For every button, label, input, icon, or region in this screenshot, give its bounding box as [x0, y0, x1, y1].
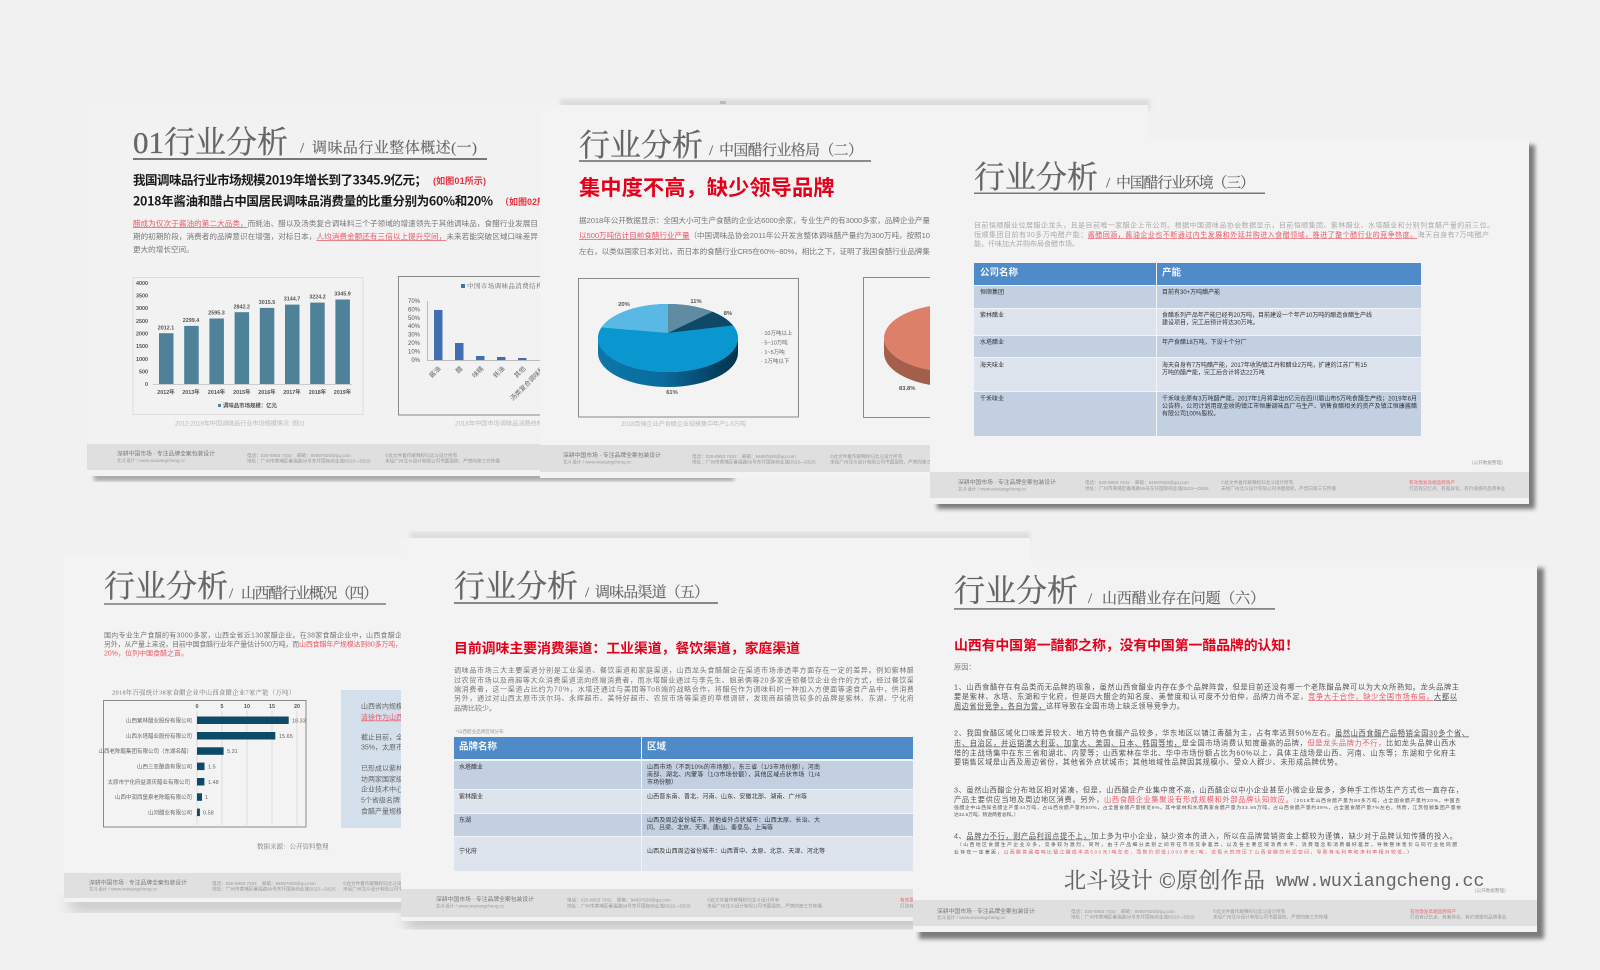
bar chart: market size 2012-2019: 3224.2 — [309, 294, 326, 300]
title: 行业分析 — [974, 160, 1098, 195]
red heading: 山西有中国第一醋都之称，没有中国第一醋品牌的认知！ — [954, 637, 1299, 653]
heading lines: 我国调味品行业市场规模2019年增长到了3345.9亿元； — [133, 170, 427, 188]
pie chart: vinegar enterprise scale: · 1~5万吨 — [761, 348, 785, 356]
title: 中国醋行业格局（二） — [719, 141, 863, 159]
footer: 未经广州北斗设计有限公司书面授权 — [343, 886, 417, 892]
text block: overview: 另外，从产量上来说，目前中国食醋行业年产量估计500万吨，而山西食醋年产规模达到80多万吨， — [104, 640, 402, 648]
footer: 北斗设计 / www.wuxiangcheng.cc — [117, 457, 186, 464]
source note: 数据来源：公开资料整理 — [257, 842, 329, 850]
footer: ©此文件着作解释权归北斗设计所有 — [385, 452, 458, 459]
bar chart: market size 2012-2019: 2018年 — [309, 388, 327, 396]
bar chart: market size 2012-2019: 2299.4 — [183, 318, 199, 324]
text block: environment — [974, 220, 1494, 248]
title: 山西醋行业概况（四） — [241, 584, 378, 602]
footer: 北斗设计 / www.wuxiangcheng.cc — [937, 914, 1006, 921]
footer: 深耕中国市场 · 专注品牌全案包装设计 — [117, 450, 215, 458]
footer: 有效激发高端品牌资产 — [1409, 479, 1455, 486]
title: / — [1106, 176, 1111, 192]
pie chart: vinegar enterprise scale: 11% — [690, 299, 702, 305]
table: brand regions: 山西市场（不到10%的市场额），东三省（1/3市场份额），河南 — [647, 763, 820, 771]
bar chart: market size 2012-2019: 2500 — [136, 319, 148, 325]
source note: (公开数据整理) — [1475, 887, 1506, 894]
callout: Shanxi summary: 企业技术中心 — [361, 784, 403, 794]
callout: Shanxi summary: 山西省内规模 — [361, 702, 403, 710]
horizontal bar chart: Shanxi vinegar capacity: 18.33 — [292, 718, 306, 724]
watermark: 北斗设计 ©原创作品 — [1064, 868, 1265, 893]
text block: channels: 调味品市场三大主要渠道分别是工业渠道、餐饮渠道和家庭渠道，山西龙头食醋醋企在渠道市场渗透率方面存在一定的差异。例如紫林醋 — [454, 666, 914, 674]
footer: 深耕中国市场 · 专注品牌全案包装设计 — [563, 451, 661, 459]
text block: environment: 能，仟味加大并购布局食醋市场。 — [974, 239, 1079, 248]
bar chart: consumption structure: 60% — [408, 308, 421, 314]
horizontal bar chart: Shanxi vinegar capacity: 太原市宁化府益源庆醋业有限公司 — [107, 778, 190, 786]
footer: 地址：广州市黄埔区番禺路89号东圩国际商业城D523—D525 — [1071, 914, 1195, 920]
table: brand regions: 南部、湖北、内蒙等（1/3市场份额），其他区域点状市场（1/4 — [647, 770, 821, 778]
table: brand regions: 宁化府 — [459, 847, 477, 855]
text block: intro: 醋成为仅次于酱油的第二大品类，而蚝油、醋以及汤类复合调味料三个子领域的增速领先于其他调味品，食醋行业发展目 — [133, 218, 538, 228]
table: company capacity: 万吨的醋产能，完工后合计将达22万吨 — [1162, 368, 1265, 376]
heading lines: 2018年酱油和醋占中国居民调味品消费量的比重分别为60%和20% — [133, 190, 493, 210]
bar chart: market size 2012-2019: 调味品市场规模：亿元 — [223, 402, 278, 410]
horizontal bar chart: Shanxi vinegar capacity: 15 — [269, 704, 275, 710]
table: brand regions: 紫林醋业 — [459, 792, 483, 800]
bar chart: consumption structure: 0% — [411, 358, 421, 364]
table: brand regions: 水塔醋业 — [459, 763, 483, 771]
table: company capacity: 海天味业 — [980, 361, 1004, 369]
horizontal bar chart: Shanxi vinegar capacity: 山西三亚酿造有限公司 — [137, 762, 192, 770]
bar chart: consumption structure: 味精 — [470, 364, 486, 380]
horizontal bar chart: Shanxi vinegar capacity: 山西紫林醋业股份有限公司 — [126, 716, 192, 724]
bar chart: consumption structure: 汤类复合调味料 — [508, 364, 547, 403]
footer — [913, 900, 1537, 926]
table: company capacity: 产能 — [1162, 266, 1182, 278]
horizontal bar chart: Shanxi vinegar capacity: 1.48 — [208, 780, 219, 786]
pie chart: vinegar enterprise scale: · 10万吨以上 — [761, 329, 793, 337]
footer: 深耕中国市场 · 专注品牌全案包装设计 — [958, 478, 1056, 486]
bar chart: market size 2012-2019: 2000 — [136, 332, 148, 338]
callout: Shanxi summary: 清徐作为山西 — [361, 712, 403, 722]
panel: slide 6 Shanxi vinegar problems — [913, 561, 1544, 939]
footer: 打造有记忆 — [900, 902, 923, 910]
title: / — [709, 143, 714, 159]
horizontal bar chart: Shanxi vinegar capacity: 0.58 — [203, 810, 214, 816]
table: brand regions: 区域 — [647, 740, 666, 752]
bar chart: market size 2012-2019: 1000 — [136, 357, 148, 363]
table: brand regions: 山西晋东南、晋北、河南、山东、安徽北部、湖南、广州等 — [647, 792, 807, 800]
footer: 地址：广州市黄埔区番禺路89号东圩国际商业城D523—D525 — [247, 458, 371, 464]
table: brand regions: 山西及山西周边省份城市：山西晋中、太原、北京、天津、河北等 — [647, 847, 825, 855]
title: / — [229, 586, 234, 602]
watermark — [1064, 868, 1484, 893]
table: brand regions: 同、吕梁、北京、天津、唐山、秦皇岛、上海等 — [647, 824, 773, 832]
text block: intro: 期的初期阶段，消费者的品牌意识在增强，对标日本，人均消费金额还有三倍以上提升空间，未来若能突破区域口味差异 — [133, 231, 538, 241]
source note: (公开数据整理) — [1472, 459, 1503, 466]
table note: *山西醋业品牌区域分布 — [456, 728, 504, 735]
text block: problem 3: 3、虽然山西醋企分布地区相对紧凑，但是，山西醋企产业集中度不高，山西醋企以中小企业甚至小微企业居多，多种手工作坊生产方式也一直存在， — [954, 786, 1463, 794]
caption: chart 02: 2018年中国市场调味品消费结构图 — [455, 420, 549, 428]
horizontal bar chart: Shanxi vinegar capacity: 山西水塔醋业股份有限公司 — [126, 732, 192, 740]
bar chart: consumption structure: 其他 — [512, 364, 528, 380]
footer: 北斗设计 / www.wuxiangcheng.cc — [563, 458, 632, 466]
title: 行业分析 — [104, 569, 228, 604]
caption: pie 1: 2018百强企业产食醋企业规模集中年产1-5万吨 — [621, 420, 746, 428]
panel: slide 2 China vinegar industry landscape — [540, 99, 1150, 478]
text block: problem 4: 4、品牌力不行，则产品利润点提不上，加上多为中小企业，缺少资本的进入，所以在品牌营销资金上都较为谨慎，缺少对于品牌认知传播的投入。 — [954, 832, 1457, 840]
callout: Shanxi summary — [341, 690, 421, 828]
panel: slide 4 Shanxi vinegar overview — [64, 557, 470, 911]
bar chart: consumption structure: 20% — [408, 341, 421, 347]
text block: environment: 恒顺集团目前有30多万吨醋产能；酱醋同源，酱油企业也不断通过内生发展和外延并购进入食醋领域，推进了整个醋行业的竞争热度。海天自身有7万吨醋产 — [974, 230, 1489, 239]
bar chart: consumption structure: 醋 — [453, 364, 465, 375]
bar chart: consumption structure — [398, 276, 598, 415]
text block: problem 2: 市、自治区，并远销澳大利亚、加拿大、美国、日本、韩国等地，是全国市场消费认知度最高的品牌，但是龙头品牌力不行，比如龙头品牌山西水 — [954, 738, 1456, 748]
table: company capacity: 建设项目，完工后预计将达30万吨。 — [1162, 318, 1259, 326]
callout: Shanxi summary: 食醋产量规模 — [361, 806, 403, 816]
footer: ©此文件着作解释权归北斗设计所有 — [830, 453, 903, 460]
title — [133, 125, 487, 160]
title: / — [1088, 591, 1093, 607]
footer: 电话：020-8953 7402 邮箱：94697630@qq.com — [247, 452, 351, 459]
horizontal bar chart: Shanxi vinegar capacity: 山河醋业有限公司 — [148, 808, 192, 816]
footer: 地址：广州市黄埔区番禺路89号东圩国际商业城D523—D525 — [1085, 485, 1209, 492]
footer: 深耕中国市场 · 专注品牌全案包装设计 — [436, 895, 534, 903]
footer — [930, 472, 1529, 498]
bar chart: consumption structure: 中国市场调味品消费结构 — [467, 281, 543, 290]
pie chart: vinegar enterprise scale: · 1万吨以下 — [761, 357, 790, 365]
table: company capacity: 年产食醋18万吨，下设十个分厂 — [1162, 338, 1247, 346]
heading lines — [133, 170, 564, 210]
callout: Shanxi summary: 截止目前，全 — [361, 732, 403, 742]
text block: intro — [133, 218, 538, 254]
bar chart: consumption structure: 蚝油 — [491, 364, 506, 380]
heading lines: (如图01所示) — [433, 175, 486, 186]
pie chart: vinegar enterprise scale: 61% — [666, 390, 678, 396]
footer — [87, 444, 727, 470]
bar chart: market size 2012-2019: 2842.2 — [234, 304, 250, 310]
text block: intro: 左右，以类似国家日本对比，而日本的食醋行业CR5在60%~80%，相比之下，证明了我国食醋行业品牌集 — [579, 246, 930, 256]
table: company capacity: 目前有30+万吨醋产能 — [1162, 288, 1220, 296]
text block: problem 1 — [954, 682, 1459, 710]
footer: 未经广州北斗设计有限公司书面授权，严禁向第三方传播 — [707, 902, 822, 910]
bar chart: market size 2012-2019: 2013年 — [182, 388, 200, 396]
bar chart: market size 2012-2019: 2019年 — [334, 388, 352, 396]
red heading: 目前调味主要消费渠道：工业渠道，餐饮渠道，家庭渠道 — [454, 640, 800, 656]
bar chart: market size 2012-2019: 0 — [145, 382, 148, 388]
footer: 北斗设计 / www.wuxiangcheng.cc — [436, 902, 505, 910]
panel: slide 5 seasoning channels — [401, 532, 1030, 928]
footer: 地址：广州市黄埔区番禺路89号东圩国际商业城D523—D525 — [692, 458, 816, 466]
title — [954, 574, 1275, 610]
footer: ©此文件着作解释权归北斗设计所有 — [1213, 908, 1286, 915]
bar chart: market size 2012-2019: 3500 — [136, 294, 148, 300]
text block: problem 3: 产品主要供应当地及周边地区消费。另外，山西食醋企业集聚没有形成规模和外部品牌认知效应。（2018年山西食醋产量为80多万吨，占全国食醋产量约20%。中国百 — [954, 795, 1460, 804]
pie chart: vinegar enterprise scale — [578, 278, 798, 417]
pie chart: vinegar enterprise scale: 8% — [724, 311, 732, 317]
table: company capacity: 食醋系列产品年产能已经有20万吨，目前建设一个年产10万吨的酿造食醋生产线 — [1162, 311, 1372, 319]
text block: problem 2: 要销售区域是山西及周边省份，其他省外点状城市；其他地域性品牌因其规模小、受众人群少、未形成品牌优势。 — [954, 758, 1342, 766]
footer: 有效激发高端品牌资产 — [1410, 908, 1456, 915]
text block: problem 1: 1、山西食醋存在有品类而无品牌的现象，虽然山西食醋业内存在多个品牌阵营，但是目前还没有哪一个老陈醋品牌可以为大众所熟知。龙头品牌主 — [954, 682, 1459, 692]
table: company capacity: 公告称，公司计划用现金收购镇江市恒康调味品厂与生产、销售食醋相关的资产及镇江恒康酱醋 — [1162, 402, 1417, 410]
footer: 打造有记忆点、有差异化、有价值感的品牌事业 — [1409, 485, 1506, 492]
text block: intro: 据2018年公开数据显示：全国大小可生产食醋的企业达6000余家，专业生产的有3000多家，品牌企业产量 — [579, 215, 930, 225]
text block: channels: 品牌比较少。 — [454, 704, 496, 712]
text block: intro: 以500万吨估计目前食醋行业产量（中国调味品协会2011年公开发言整体调味醋产量约为300万吨，按照10 — [579, 230, 930, 240]
bar chart: market size 2012-2019: 2015年 — [233, 388, 251, 396]
text block: problem 2 — [954, 728, 1469, 766]
horizontal bar chart: Shanxi vinegar capacity: 5 — [220, 704, 224, 710]
pie chart: share — [864, 278, 1054, 418]
text block: intro: 更大的增长空间。 — [133, 244, 194, 254]
horizontal bar chart: Shanxi vinegar capacity: 1.5 — [208, 764, 216, 770]
text block: problem 3: 达32.5万吨，稍逊两者总和。） — [954, 811, 1018, 818]
footer: 有效激发 — [900, 896, 919, 904]
text block: problem 4 — [954, 832, 1457, 856]
title: 中国醋行业环境（三） — [1116, 174, 1255, 192]
footer: 电话：020-8953 7402 邮箱：94697630@qq.com — [567, 896, 671, 904]
bar chart: consumption structure: 40% — [408, 324, 421, 330]
table: company capacity: 千禾味业原有3万吨醋产能，2017年1月将拿出5亿元在四川眉山布5万吨食醋生产线；2019年6月 — [1162, 394, 1417, 402]
callout: Shanxi summary: 已形成以紫林 — [361, 764, 403, 772]
horizontal bar chart: Shanxi vinegar capacity: 15.65 — [279, 734, 293, 740]
footer — [64, 873, 464, 898]
horizontal bar chart: Shanxi vinegar capacity — [98, 700, 306, 827]
footer: 北斗设计 / www.wuxiangcheng.cc — [89, 886, 158, 892]
table: brand regions: 品牌名称 — [459, 740, 498, 752]
text block: problem 4: （山西地区食醋生产企业众多，竞争较为激烈。同时，由于产品细分类别之间存在市场竞争差异，以及各主要区域消费水平、消费理念和消费偏好差异，导致整体售价与同行业他同醋 — [957, 841, 1457, 848]
callout: Shanxi summary: 5个省级名牌 — [361, 796, 400, 804]
footer: 电话：020-8953 7402 邮箱：94697630@qq.com — [1071, 908, 1175, 915]
table: brand regions: 东湖 — [459, 816, 471, 824]
title: 行业分析 — [454, 569, 578, 604]
title: / — [585, 585, 590, 601]
text block: problem 3: 强醋企中山西知名醋企产量44万吨，占山西食醋产量约50%，占全国食醋产量接近9%。其中紫林和水塔两家食醋产量为33.95万吨，占山西食醋产量约39%，占全国食醋产量7%左右。然而，江苏恒顺集团产量依 — [954, 804, 1461, 811]
callout: Shanxi summary: 坊两家国家级 — [361, 774, 403, 784]
table: brand regions: 市场份额） — [647, 778, 677, 786]
footer: 地址：广州市黄埔区番禺路89号东圩国际商业城D523—D525 — [567, 902, 691, 910]
footer: 北斗设计 / www.wuxiangcheng.cc — [958, 486, 1027, 492]
title: 山西醋业存在问题（六） — [1102, 590, 1265, 607]
title — [454, 569, 718, 604]
footer — [540, 445, 1148, 472]
chart title: 2018年百强统计38家食醋企业中山西食醋企业7家产能（万吨） — [112, 688, 295, 696]
title: 行业分析 — [954, 574, 1078, 608]
table: brand regions: 山西及周边省份城市、其他省外点状城市：山西太原、长治、大 — [647, 816, 820, 824]
footer: 未经广州北斗设计有限公司书面授权，严禁向第三方传播 — [385, 458, 500, 464]
bar chart: market size 2012-2019: 2016年 — [258, 388, 276, 396]
text block: overview: 20%，位列中国食醋之首。 — [104, 648, 188, 658]
footer: 未经广州北斗设计有限公司书面授权，严禁向第三方传播 — [1213, 914, 1328, 920]
bar chart: market size 2012-2019: 3345.9 — [334, 292, 351, 298]
bar chart: consumption structure: 10% — [408, 350, 421, 356]
title: 01行业分析 — [133, 125, 288, 160]
watermark: www.wuxiangcheng.cc — [1276, 872, 1484, 892]
bar chart: market size 2012-2019: 1500 — [136, 344, 148, 350]
table: company capacity: 水塔醋业 — [980, 338, 1004, 346]
footer: 深耕中国市场 · 专注品牌全案包装设计 — [937, 907, 1035, 915]
table: company capacity: 千禾味业 — [980, 394, 1004, 402]
bar chart: market size 2012-2019: 3144.7 — [284, 296, 300, 302]
horizontal bar chart: Shanxi vinegar capacity: 10 — [244, 704, 250, 710]
table: company capacity: 海天自身有7万吨醋产能，2017年收购镇江丹和醋业2万吨，扩建的江苏厂有15 — [1162, 361, 1368, 369]
title: 行业分析 — [579, 128, 703, 163]
bar chart: consumption structure: 30% — [408, 332, 421, 338]
bar chart: market size 2012-2019: 2012.1 — [158, 326, 174, 332]
text block: problem 1: 周边省份竞争，各自为营，这样导致在全国市场上缺乏领导竞争力。 — [954, 702, 1184, 710]
pie chart: vinegar enterprise scale: 20% — [618, 302, 630, 308]
bar chart: consumption structure: 70% — [408, 299, 421, 305]
table: company capacity: 恒顺集团 — [980, 288, 1004, 296]
horizontal bar chart: Shanxi vinegar capacity: 山西老陈醋集团有限公司（东湖名醋） — [98, 747, 192, 755]
table: company capacity: 紫林醋业 — [980, 311, 1004, 319]
text block: channels: 过农贸市场以及商超等大众消费渠道流向终端消费者，而水塔醋业通过与李先生、姐弟俩等20多家连锁餐饮企业合作的方式，经过餐饮渠 — [454, 676, 914, 684]
text block: overview — [104, 630, 402, 658]
bar chart: consumption structure: 50% — [408, 316, 421, 322]
heading lines: （如图02所示） — [500, 196, 564, 207]
footer: 未经广州北斗设计有限公司书面授权，严禁向第三方传播 — [830, 458, 945, 466]
footer: ©此文件着作解释权归北斗设计所有 — [1221, 479, 1294, 486]
text block: intro — [579, 215, 930, 256]
footer: ©此文件着作解释权归北斗设计所有 — [707, 896, 780, 904]
callout: Shanxi summary: 35%，太原市 — [361, 742, 403, 752]
text block: problem 4: 业存在一定差距， 山西醋普遍每吨比镇江醋成本高500元/吨左右，而售价却低1000多元/吨，这极大的挤压了山西食醋的利润空间，导致其毛利率和净利率相对较低。 ） — [954, 848, 1412, 856]
footer — [401, 889, 1030, 917]
title: / — [300, 140, 305, 156]
red heading: 集中度不高，缺少领导品牌 — [579, 175, 835, 200]
table: company capacity — [974, 263, 1421, 436]
text block: problem 3 — [954, 786, 1463, 818]
panel: slide 3 vinegar industry environment — [930, 138, 1535, 509]
title — [579, 128, 871, 163]
bar chart: market size 2012-2019: 500 — [139, 369, 148, 375]
text block: channels: 端消费者，这一渠道占比约为70%，水塔还通过与美团等ToB端的战略合作，将醋包作为调味料的一种加入方便面等速食产品中，供消费 — [454, 684, 914, 694]
text block: channels — [454, 666, 914, 712]
footer: ©此文件着作解释权归北斗设计所有 — [343, 880, 416, 887]
footer: 打造有记忆点、有差异化、有价值感的品牌事业 — [1410, 914, 1507, 920]
table: company capacity: 公司名称 — [980, 266, 1019, 278]
bar chart: market size 2012-2019: 3015.5 — [259, 300, 275, 306]
bar chart: market size 2012-2019 — [133, 278, 363, 414]
pie chart: share: 83.8% — [899, 386, 915, 392]
text block: problem 1: 要是紫林、水塔、东湖和宁化府，但是四大醋企的知名度、美誉度和认可度不分伯仲，品牌力尚不足，竞争大于合作，缺少全国市场布局，大都以 — [954, 692, 1457, 701]
text block: cause label: 原因： — [954, 662, 976, 672]
bar chart: market size 2012-2019: 2017年 — [283, 388, 301, 396]
table: company capacity: 有限公司100%股权。 — [1162, 410, 1219, 418]
bar chart: market size 2012-2019: 2595.3 — [208, 310, 225, 316]
title — [104, 569, 386, 605]
horizontal bar chart: Shanxi vinegar capacity: 1 — [205, 795, 208, 801]
bar chart: market size 2012-2019: 2014年 — [208, 388, 226, 396]
bar chart: market size 2012-2019: 3000 — [136, 306, 148, 312]
horizontal bar chart: Shanxi vinegar capacity: 20 — [294, 704, 300, 710]
horizontal bar chart: Shanxi vinegar capacity: 0 — [196, 704, 198, 710]
footer: 地址：广州市黄埔区番禺路89号东圩国际商业城D523—D525 — [212, 886, 336, 892]
title: 调味品行业整体概述(一) — [312, 138, 477, 156]
footer: 电话：020-8953 7402 邮箱：94697630@qq.com — [1085, 479, 1189, 486]
bar chart: market size 2012-2019: 2012年 — [157, 388, 175, 396]
bar chart: consumption structure: 酱油 — [427, 364, 442, 380]
text block: problem 2: 塔的主战场集中在东三省和湖北、内蒙等；山西紫林在华北、华中市场份额占比为60%以上，具体主战场是山西、河南、山东等；东湖和宁化府主 — [954, 748, 1456, 758]
horizontal bar chart: Shanxi vinegar capacity: 5.31 — [227, 749, 238, 755]
panel: slide 1 seasoning industry overview — [87, 100, 734, 481]
text block: overview: 国内专业生产食醋的有3000多家，山西全省近130家醋企业。在38家食醋企业中，山西食醋企 — [104, 630, 402, 640]
bar chart: market size 2012-2019: 4000 — [136, 281, 148, 287]
text block: channels: 另外，通过对山西太原市沃尔玛、永辉超市、美特好超市、农贸市场等渠道的草根调研，发现商超铺货较多的品牌是紫林、东湖、宁化府 — [454, 694, 914, 702]
footer: 深耕中国市场 · 专注品牌全案包装设计 — [89, 878, 187, 886]
footer: 未经广州北斗设计有限公司书面授权，严禁向第三方传播 — [1221, 485, 1336, 492]
table: brand regions — [454, 737, 913, 871]
footer: 电话：020-8953 7402 邮箱：94697630@qq.com — [692, 453, 796, 460]
caption: chart 01: 2012-2019年中国调味品行业市场规模情况 图01 — [175, 420, 306, 428]
title: 调味品渠道（五） — [595, 584, 709, 601]
text block: problem 2: 2、我国食醋区域化口味差异较大、地方特色食醋产品较多，华东地区以镇江香醋为主，占有率达到50%左右。虽然山西食醋产品畅销全国30多个省、 — [954, 728, 1469, 738]
footer: 电话：020-8953 7402 邮箱：94697630@qq.com — [212, 880, 316, 887]
horizontal bar chart: Shanxi vinegar capacity: 山西中润西堡泉老陈醋有限公司 — [115, 793, 192, 801]
title — [974, 160, 1265, 195]
text block: environment: 目前恒顺醋业位居醋企龙头，且是目前唯一家醋企上市公司。根据中国调味品协会数据显示，目前恒顺集团、紫林醋业、水塔醋业和分别列食醋产量的前三位。 — [974, 220, 1494, 230]
pie chart: vinegar enterprise scale: · 5~10万吨 — [761, 338, 788, 346]
